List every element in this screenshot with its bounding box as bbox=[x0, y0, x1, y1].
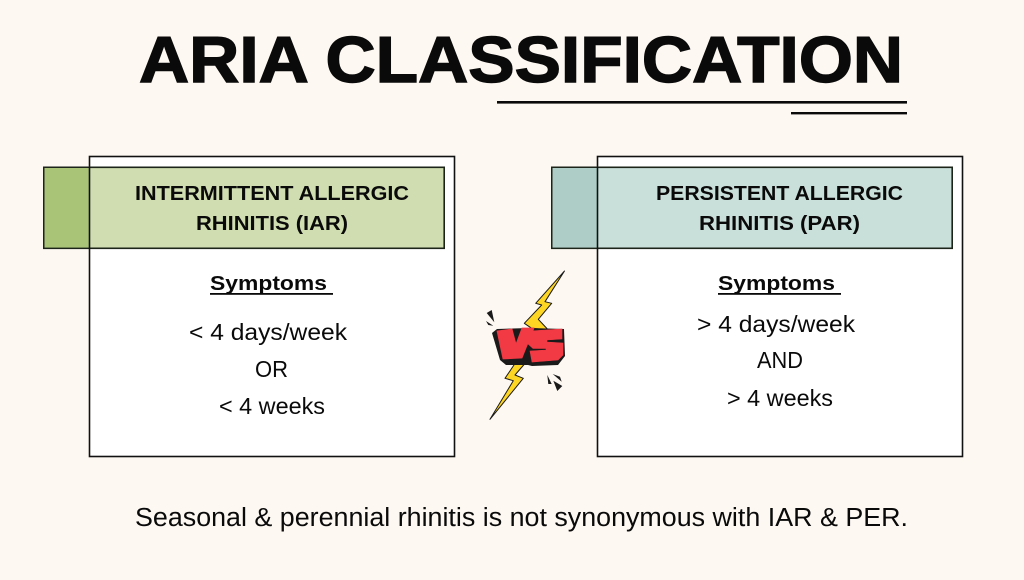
symptoms criteria: < 4 weeks bbox=[219, 393, 325, 419]
lightning bolt lower bbox=[490, 360, 528, 419]
header text: INTERMITTENT ALLERGIC bbox=[135, 182, 409, 205]
lightning bolt upper bbox=[524, 271, 564, 330]
header band dark overlap bbox=[552, 168, 598, 248]
header text: RHINITIS (PAR) bbox=[699, 212, 860, 235]
title underline bbox=[497, 101, 907, 114]
letter V bbox=[497, 328, 534, 359]
panel: persistent allergic rhinitis bbox=[552, 156, 962, 456]
header text bbox=[656, 182, 903, 235]
header band bbox=[44, 167, 444, 248]
icon: VS lightning bolt bbox=[486, 271, 565, 419]
letter S bbox=[527, 329, 563, 362]
panel: intermittent allergic rhinitis bbox=[44, 156, 455, 456]
title: ARIA CLASSIFICATION bbox=[139, 23, 903, 96]
symptoms heading: Symptoms bbox=[718, 272, 835, 295]
symptoms criteria bbox=[189, 319, 348, 419]
symptoms heading: Symptoms bbox=[210, 272, 327, 295]
panel card bbox=[90, 156, 454, 456]
symptoms criteria: AND bbox=[757, 347, 803, 373]
footer note: Seasonal & perennial rhinitis is not synonymous with IAR & PER. bbox=[135, 504, 908, 532]
header text: RHINITIS (IAR) bbox=[196, 212, 348, 235]
symptoms criteria: OR bbox=[255, 356, 288, 382]
header text bbox=[135, 182, 409, 235]
header text: PERSISTENT ALLERGIC bbox=[656, 182, 903, 205]
symptoms criteria bbox=[697, 311, 856, 411]
burst marks bbox=[487, 310, 494, 322]
symptoms criteria: < 4 days/week bbox=[189, 319, 348, 345]
header band bbox=[552, 167, 952, 248]
header band dark overlap bbox=[44, 168, 90, 248]
symptoms criteria: > 4 weeks bbox=[727, 385, 833, 411]
symptoms criteria: > 4 days/week bbox=[697, 311, 856, 337]
panel card bbox=[598, 156, 962, 456]
VS shadow bbox=[492, 328, 565, 366]
